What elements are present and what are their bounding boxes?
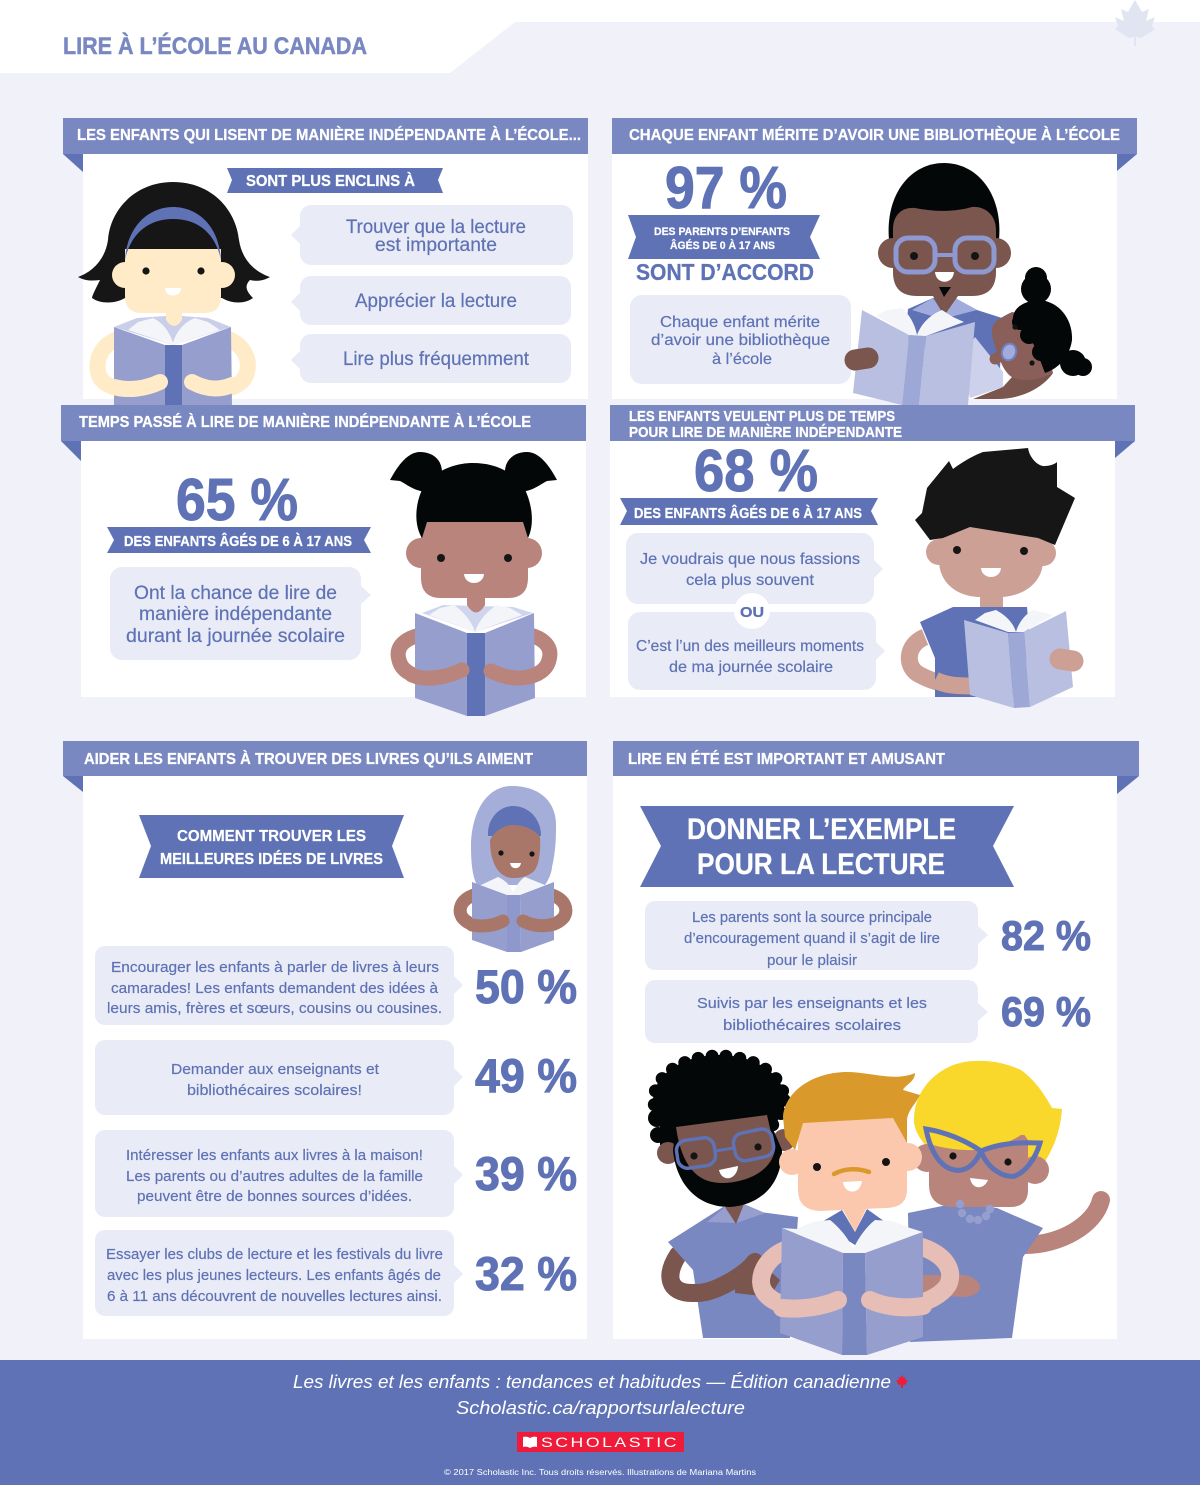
row: parents 82 % — [645, 901, 1091, 970]
panel heading — [61, 405, 586, 441]
bubble: enjoy reading — [291, 276, 571, 325]
row: parents 82 %: pour le plaisir — [767, 952, 857, 969]
panel heading: TEMPS PASSÉ À LIRE DE MANIÈRE INDÉPENDANTE À L’ÉCOLE — [79, 414, 531, 431]
bubble: have the chance to read: Ont la chance de lire de — [134, 583, 337, 604]
icon: maple leaf watermark — [1115, 0, 1155, 46]
ribbon: parents of children 0 to 17 — [628, 215, 820, 259]
row: talk with peers 50 %: leurs amis, frères et sœurs, cousins ou cousines. — [107, 1000, 442, 1017]
footer link: Scholastic.ca/rapportsurlalecture — [456, 1397, 745, 1418]
panel: independent readers at school — [63, 118, 588, 405]
illustration: girl with pigtails reading — [390, 452, 557, 716]
panel heading — [63, 741, 587, 776]
panel: helping kids find books — [63, 741, 587, 1339]
figure: man with orange hair holding book — [761, 1072, 950, 1355]
row: clubs and festivals 32 % — [95, 1230, 577, 1316]
row: talk with peers 50 %: camarades! Les enfants demandent des idées à — [111, 980, 439, 997]
row: ask teachers 49 %: bibliothécaires scolaires! — [187, 1082, 362, 1099]
row: talk with peers 50 %: Encourager les enfants à parler de livres à leurs — [111, 959, 439, 976]
icon: red maple leaf — [896, 1375, 908, 1388]
panel heading: LIRE EN ÉTÉ EST IMPORTANT ET AMUSANT — [628, 751, 946, 768]
bubble: every child deserves a library: d’avoir une bibliothèque — [651, 332, 830, 349]
logo: Scholastic: SCHOLASTIC — [541, 1434, 679, 1450]
bubble: have the chance to read: manière indépendante — [139, 604, 332, 625]
stat: 97 %: 97 % — [665, 155, 787, 221]
panel: school library — [612, 118, 1137, 405]
copyright: © 2017 Scholastic Inc. Tous droits réservés. Illustrations de Mariana Martins — [444, 1468, 756, 1477]
figure: man with afro and beard — [648, 1055, 798, 1338]
figure: woman with yellow hair — [908, 1061, 1101, 1342]
illustration: three adults reading together — [648, 1055, 1101, 1355]
ribbon: parents of children 0 to 17: ÂGÉS DE 0 À 17 ANS — [670, 239, 775, 252]
bubble: reading is important: Trouver que la lecture — [346, 217, 526, 238]
panel: kids want more time — [610, 405, 1135, 708]
row: clubs and festivals 32 %: Essayer les clubs de lecture et les festivals du livre — [106, 1246, 443, 1263]
illustration: father reading with baby — [853, 163, 1092, 405]
title: LIRE À L’ÉCOLE AU CANADA — [63, 32, 367, 60]
bubble: read more often — [291, 334, 571, 383]
ribbon: children 6 to 17: DES ENFANTS ÂGÉS DE 6 À 17 ANS — [124, 532, 352, 550]
footer title: Les livres et les enfants : tendances et habitudes — Édition canadienne — [293, 1371, 891, 1392]
badge: or: OU — [740, 604, 764, 621]
row: parents 82 %: 82 % — [1001, 912, 1091, 959]
panel heading: POUR LIRE DE MANIÈRE INDÉPENDANTE — [629, 424, 902, 441]
panel: time spent reading — [61, 405, 586, 716]
row: interest at home 39 %: peuvent être de bonnes sources d’idées. — [137, 1188, 412, 1205]
stat: 68 %: 68 % — [694, 438, 818, 504]
row: ask teachers 49 %: 49 % — [475, 1049, 577, 1102]
ribbon: more likely to — [227, 168, 443, 193]
panel heading — [63, 118, 588, 154]
row: interest at home 39 %: Les parents ou d’autres adultes de la famille — [126, 1168, 423, 1185]
illustration: girl with headband reading — [78, 182, 270, 405]
ribbon: children 6 to 17 — [107, 527, 371, 553]
logo: Scholastic — [517, 1432, 684, 1452]
ribbon: children 6 to 17: DES ENFANTS ÂGÉS DE 6 À 17 ANS — [634, 504, 862, 522]
row: parents 82 %: d’encouragement quand il s’agit de lire — [684, 930, 940, 947]
row: teachers 69 %: 69 % — [1001, 988, 1091, 1035]
row: interest at home 39 %: 39 % — [475, 1147, 577, 1200]
bubble: wish we did it more: cela plus souvent — [686, 572, 815, 589]
ribbon: how to find book ideas: MEILLEURES IDÉES DE LIVRES — [160, 849, 383, 868]
illustration: girl in hijab reading — [460, 786, 566, 952]
bubble: wish we did it more — [626, 533, 883, 604]
row: parents 82 %: Les parents sont la source principale — [692, 909, 932, 926]
row: clubs and festivals 32 %: 6 à 11 ans découvrent de nouvelles lectures ainsi. — [107, 1288, 442, 1305]
row: talk with peers 50 % — [95, 946, 577, 1025]
ribbon: children 6 to 17 — [620, 498, 878, 525]
panel heading: AIDER LES ENFANTS À TROUVER DES LIVRES QU’ILS AIMENT — [84, 751, 534, 768]
bubble: best part of the day — [628, 612, 885, 690]
ribbon: more likely to: SONT PLUS ENCLINS À — [246, 173, 415, 190]
bubble: wish we did it more: Je voudrais que nous fassions — [640, 551, 860, 568]
bubble: enjoy reading: Apprécier la lecture — [355, 291, 517, 312]
row: teachers 69 %: bibliothécaires scolaires — [723, 1017, 901, 1034]
bubble: every child deserves a library — [630, 295, 851, 384]
panel heading — [613, 741, 1139, 776]
panel heading: LES ENFANTS VEULENT PLUS DE TEMPS — [629, 409, 895, 425]
bubble: read more often: Lire plus fréquemment — [343, 349, 530, 370]
bubble: reading is important: est importante — [375, 235, 497, 256]
row: ask teachers 49 %: Demander aux enseignants et — [171, 1061, 380, 1078]
bubble: every child deserves a library: Chaque enfant mérite — [660, 314, 820, 331]
panel heading: CHAQUE ENFANT MÉRITE D’AVOIR UNE BIBLIOTHÈQUE À L’ÉCOLE — [629, 127, 1120, 144]
bubble: have the chance to read: durant la journée scolaire — [126, 626, 345, 647]
row: clubs and festivals 32 %: avec les plus jeunes lecteurs. Les enfants âgés de — [107, 1267, 441, 1284]
row: teachers 69 % — [645, 980, 1091, 1043]
ribbon: lead by example: DONNER L’EXEMPLE — [687, 813, 956, 846]
panel heading — [610, 405, 1135, 441]
row: ask teachers 49 % — [95, 1040, 577, 1115]
row: interest at home 39 %: Intéresser les enfants aux livres à la maison! — [126, 1147, 423, 1164]
row: talk with peers 50 %: 50 % — [475, 960, 577, 1013]
illustration: boy reading — [909, 448, 1075, 708]
ribbon: lead by example — [640, 806, 1014, 887]
row: clubs and festivals 32 %: 32 % — [475, 1247, 577, 1300]
bubble: have the chance to read — [110, 567, 371, 660]
stat: 65 %: 65 % — [176, 467, 298, 533]
footer band — [0, 1360, 1200, 1485]
label: agree: SONT D’ACCORD — [636, 259, 814, 285]
badge: or — [734, 593, 770, 629]
ribbon: lead by example: POUR LA LECTURE — [697, 848, 945, 881]
bubble: every child deserves a library: à l’école — [712, 351, 772, 368]
row: teachers 69 %: Suivis par les enseignants et les — [697, 995, 927, 1012]
bubble: best part of the day: de ma journée scolaire — [669, 659, 833, 676]
panel heading — [612, 118, 1137, 154]
panel heading: LES ENFANTS QUI LISENT DE MANIÈRE INDÉPENDANTE À L’ÉCOLE... — [77, 127, 581, 144]
panel: summer reading — [613, 741, 1139, 1355]
ribbon: how to find book ideas: COMMENT TROUVER LES — [177, 828, 366, 845]
row: interest at home 39 % — [95, 1130, 577, 1217]
ribbon: parents of children 0 to 17: DES PARENTS D’ENFANTS — [654, 226, 790, 238]
bubble: reading is important — [291, 205, 573, 265]
ribbon: how to find book ideas — [139, 815, 404, 878]
bubble: best part of the day: C’est l’un des meilleurs moments — [636, 638, 864, 655]
